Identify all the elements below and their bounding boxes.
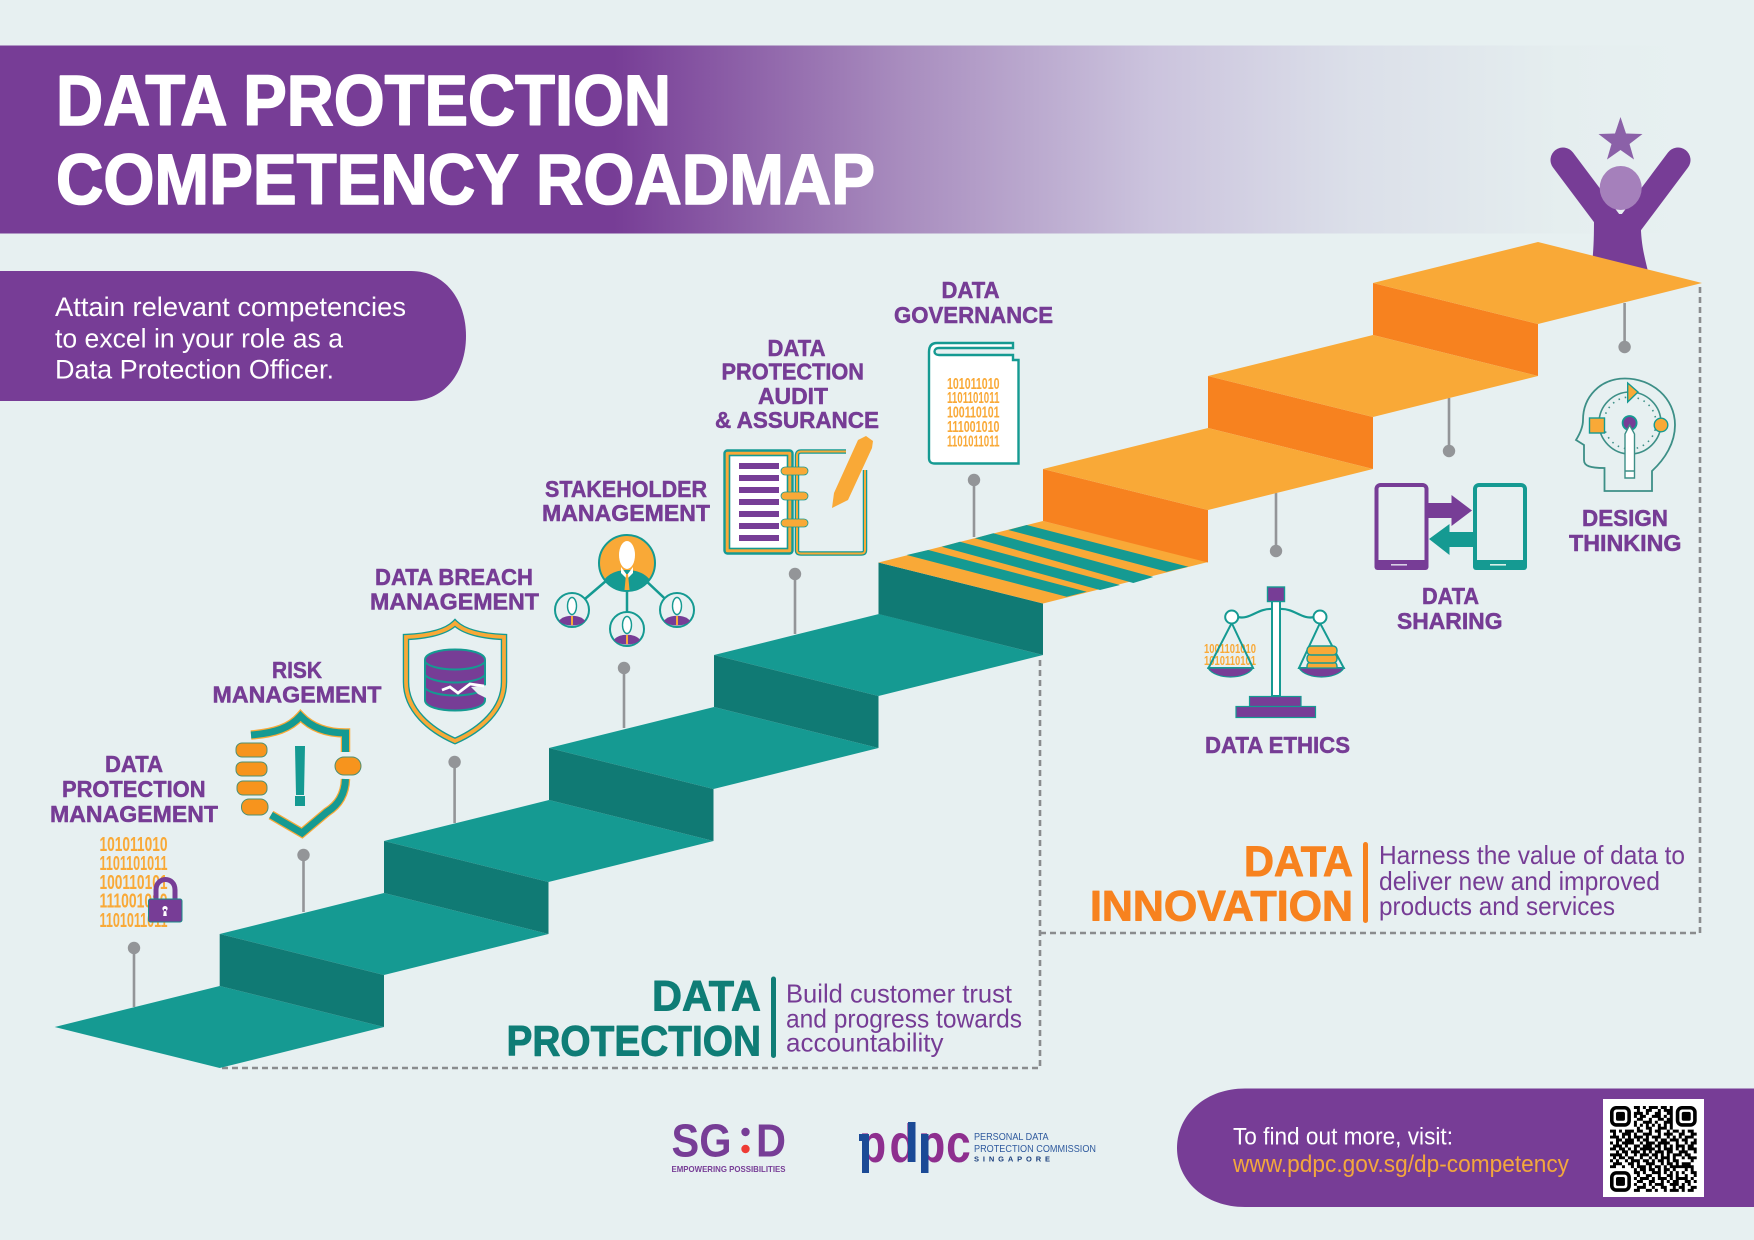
icon: binary book: 101011010 [947, 376, 1000, 393]
footer callout [1177, 1088, 1754, 1207]
pin stems and dots [128, 303, 1631, 1007]
icon: binary and padlock: 100110101 [100, 872, 168, 894]
heading: INNOVATION [1090, 882, 1353, 930]
icon: binary and padlock: 111001010 [100, 890, 168, 912]
label [1569, 505, 1682, 556]
label [715, 335, 879, 433]
label: STAKEHOLDER [545, 476, 707, 502]
icon: shield with breached database [406, 623, 504, 741]
label: PROTECTION [722, 358, 864, 384]
orange steps [1043, 242, 1702, 562]
icon: exchanging devices [1374, 485, 1527, 570]
title: DATA PROTECTION [56, 62, 671, 141]
label: DATA [942, 277, 1000, 303]
icon: stakeholder network [555, 535, 694, 646]
staircase [55, 242, 1702, 1068]
dashed bracket: data protection [222, 657, 1040, 1068]
competency: risk management [212, 657, 382, 833]
section: data protection [506, 972, 1022, 1066]
competency: data protection management [50, 751, 218, 932]
label [50, 751, 218, 827]
icon: binary and padlock: 101011010 [100, 834, 168, 856]
title banner [0, 46, 1754, 234]
description [786, 978, 1022, 1058]
competency: stakeholder management [542, 476, 710, 646]
competency: data governance [894, 277, 1053, 464]
description: deliver new and improved [1379, 866, 1660, 896]
heading: PROTECTION [506, 1018, 761, 1066]
heading: DATA [1244, 838, 1353, 886]
competency: data sharing [1374, 485, 1527, 634]
description: products and services [1379, 891, 1615, 921]
label: AUDIT [758, 383, 828, 409]
heading [1090, 838, 1353, 930]
icon: binary book: 1101011011 [947, 434, 1000, 450]
label [542, 476, 710, 526]
dashed bracket: data innovation [1040, 285, 1700, 933]
title: COMPETENCY ROADMAP [56, 141, 875, 220]
label: DATA ETHICS [1205, 732, 1350, 758]
label [212, 657, 382, 708]
intro callout: to excel in your role as a [55, 324, 344, 354]
icon: binary book: 1101101011 [947, 390, 1000, 407]
logo: PDPC: PERSONAL DATA [974, 1132, 1049, 1143]
label: SHARING [1397, 608, 1502, 634]
heading: DATA [652, 972, 761, 1020]
competency: design thinking [1569, 378, 1682, 556]
logo: PDPC: PROTECTION COMMISSION [974, 1144, 1096, 1155]
label: GOVERNANCE [894, 302, 1053, 328]
title [56, 62, 875, 220]
logo: PDPC: SINGAPORE [974, 1154, 1050, 1164]
icon: shield held by hand [236, 716, 361, 833]
label: RISK [272, 657, 322, 683]
footer callout: www.pdpc.gov.sg/dp-competency [1232, 1151, 1569, 1178]
icon: head with design mechanics [1576, 378, 1675, 491]
description: Harness the value of data to [1379, 840, 1685, 870]
icon: binary and padlock: 1101011011 [100, 910, 168, 932]
competency: data ethics [1204, 587, 1350, 758]
intro callout: Data Protection Officer. [55, 354, 334, 384]
description [1379, 840, 1685, 921]
logo: SG:D: SG [672, 1114, 732, 1166]
label: MANAGEMENT [50, 801, 218, 827]
label: DATA [1422, 583, 1479, 609]
icon: binary book: 111001010 [947, 419, 1000, 436]
label [894, 277, 1053, 328]
achiever figure with star [1563, 117, 1678, 275]
icon: binary book [929, 343, 1018, 464]
teal steps [55, 562, 1043, 1068]
icon: binary and padlock: 1101101011 [100, 853, 168, 875]
section: data innovation [1090, 838, 1685, 930]
label: DATA [105, 751, 163, 777]
icon: scales: 1001101010 [1204, 641, 1256, 656]
icon: scales [1204, 587, 1344, 718]
competency: data breach management [370, 564, 539, 741]
logo: PDPC: pdpc [859, 1114, 971, 1174]
label [1397, 583, 1502, 634]
label: MANAGEMENT [370, 588, 539, 614]
description: and progress towards [786, 1004, 1022, 1034]
label: MANAGEMENT [212, 682, 382, 708]
logo: SG:D [672, 1114, 786, 1174]
logo: SG:D: EMPOWERING POSSIBILITIES [672, 1164, 786, 1174]
label: MANAGEMENT [542, 500, 710, 526]
competency: data protection audit and assurance [715, 335, 879, 554]
icon: binary and padlock [100, 834, 182, 932]
footer callout: To find out more, visit: [1233, 1124, 1453, 1150]
icon: binary book: 100110101 [947, 404, 1000, 422]
description: accountability [786, 1028, 944, 1058]
logo: PDPC [859, 1114, 1096, 1174]
intro callout: Attain relevant competencies [55, 292, 406, 322]
icon: scales: 1010110101 [1204, 653, 1256, 668]
heading [506, 972, 761, 1066]
QR code [1603, 1099, 1704, 1197]
label: THINKING [1569, 530, 1682, 556]
icon: notebook and pen [724, 436, 873, 554]
description: Build customer trust [786, 978, 1013, 1008]
label: & ASSURANCE [715, 407, 879, 433]
striped transition step [878, 521, 1208, 604]
label: PROTECTION [62, 776, 206, 802]
label: DESIGN [1582, 505, 1668, 531]
label: DATA BREACH [375, 564, 533, 590]
logo: SG:D: D [756, 1114, 786, 1166]
label: DATA [768, 335, 826, 361]
label [370, 564, 539, 614]
intro callout [0, 271, 466, 401]
